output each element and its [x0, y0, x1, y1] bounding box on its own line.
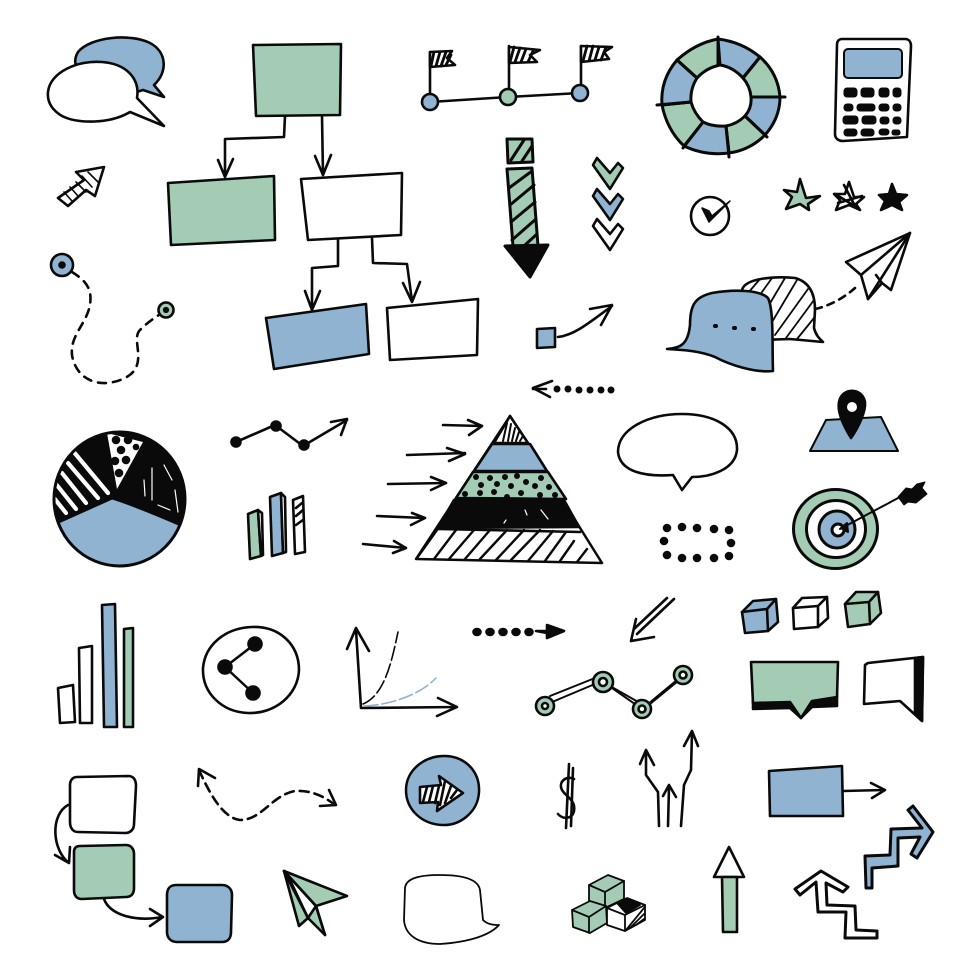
flowchart green box [168, 176, 275, 245]
icon: dotted left arrow [533, 381, 613, 397]
icon: overlapping speech bubbles [48, 37, 164, 126]
icon: target with arrow [794, 482, 927, 568]
flow of three rounded boxes [55, 776, 232, 942]
icon: stars [784, 179, 907, 210]
stacked cubes [572, 875, 645, 933]
line chart with ring nodes [536, 666, 692, 718]
pyramid input arrows [363, 420, 482, 553]
icon: square with rising arrow [537, 305, 612, 348]
icon: calculator [835, 39, 911, 141]
icon: small striped arrow [58, 167, 104, 206]
flowchart white box [301, 173, 402, 240]
axis chart with curves [347, 628, 457, 716]
blue box with arrow [769, 766, 885, 816]
pie chart [50, 428, 190, 570]
dotted rectangle [661, 524, 734, 561]
icon: map pin [810, 391, 898, 451]
icon: three chevrons [593, 158, 623, 250]
hatched bubble [742, 277, 823, 342]
bar chart tall [58, 604, 133, 727]
open speech bubble [404, 875, 499, 944]
white callout with shadow [864, 657, 923, 721]
pyramid chart [416, 416, 602, 563]
icon: dollar sign [558, 764, 574, 828]
dashed wavy double arrow [198, 769, 336, 820]
flowchart blue box [266, 304, 369, 369]
green callout [751, 662, 838, 718]
curved arrow two [104, 899, 163, 926]
dotted right arrow [474, 625, 564, 638]
flowchart top green box [253, 44, 341, 116]
icon: three cubes [742, 592, 881, 633]
plane dash line [815, 288, 855, 309]
icon: share circle [203, 627, 299, 713]
white speech bubble [618, 414, 737, 490]
flowchart lower connectors [305, 238, 420, 310]
curved arrow one [55, 805, 70, 863]
icon: three up arrows [640, 731, 698, 826]
flowchart connectors [218, 116, 331, 177]
green paper plane [284, 871, 347, 935]
icon: down-left double arrow [631, 598, 674, 641]
flowchart [168, 44, 478, 369]
blue rounded box [167, 885, 232, 942]
green rounded box [74, 845, 134, 899]
line chart with arrow [232, 419, 347, 450]
icon: dashed path with pins [51, 254, 174, 383]
icon: check mark badge [691, 197, 730, 235]
paper plane [846, 233, 910, 299]
flowchart white lower box [387, 299, 478, 360]
icon: down pencil arrow [505, 139, 548, 277]
icon: blue circle with striped arrow [406, 756, 479, 825]
segmented donut chart [657, 37, 785, 157]
blue bubble with dots [667, 291, 773, 371]
3D bar chart [248, 493, 305, 559]
stair arrows [795, 806, 933, 938]
speech bubbles with paper plane [667, 233, 910, 371]
white rounded box [70, 776, 136, 833]
timeline with flags [422, 46, 612, 110]
up arrow green [714, 847, 744, 932]
